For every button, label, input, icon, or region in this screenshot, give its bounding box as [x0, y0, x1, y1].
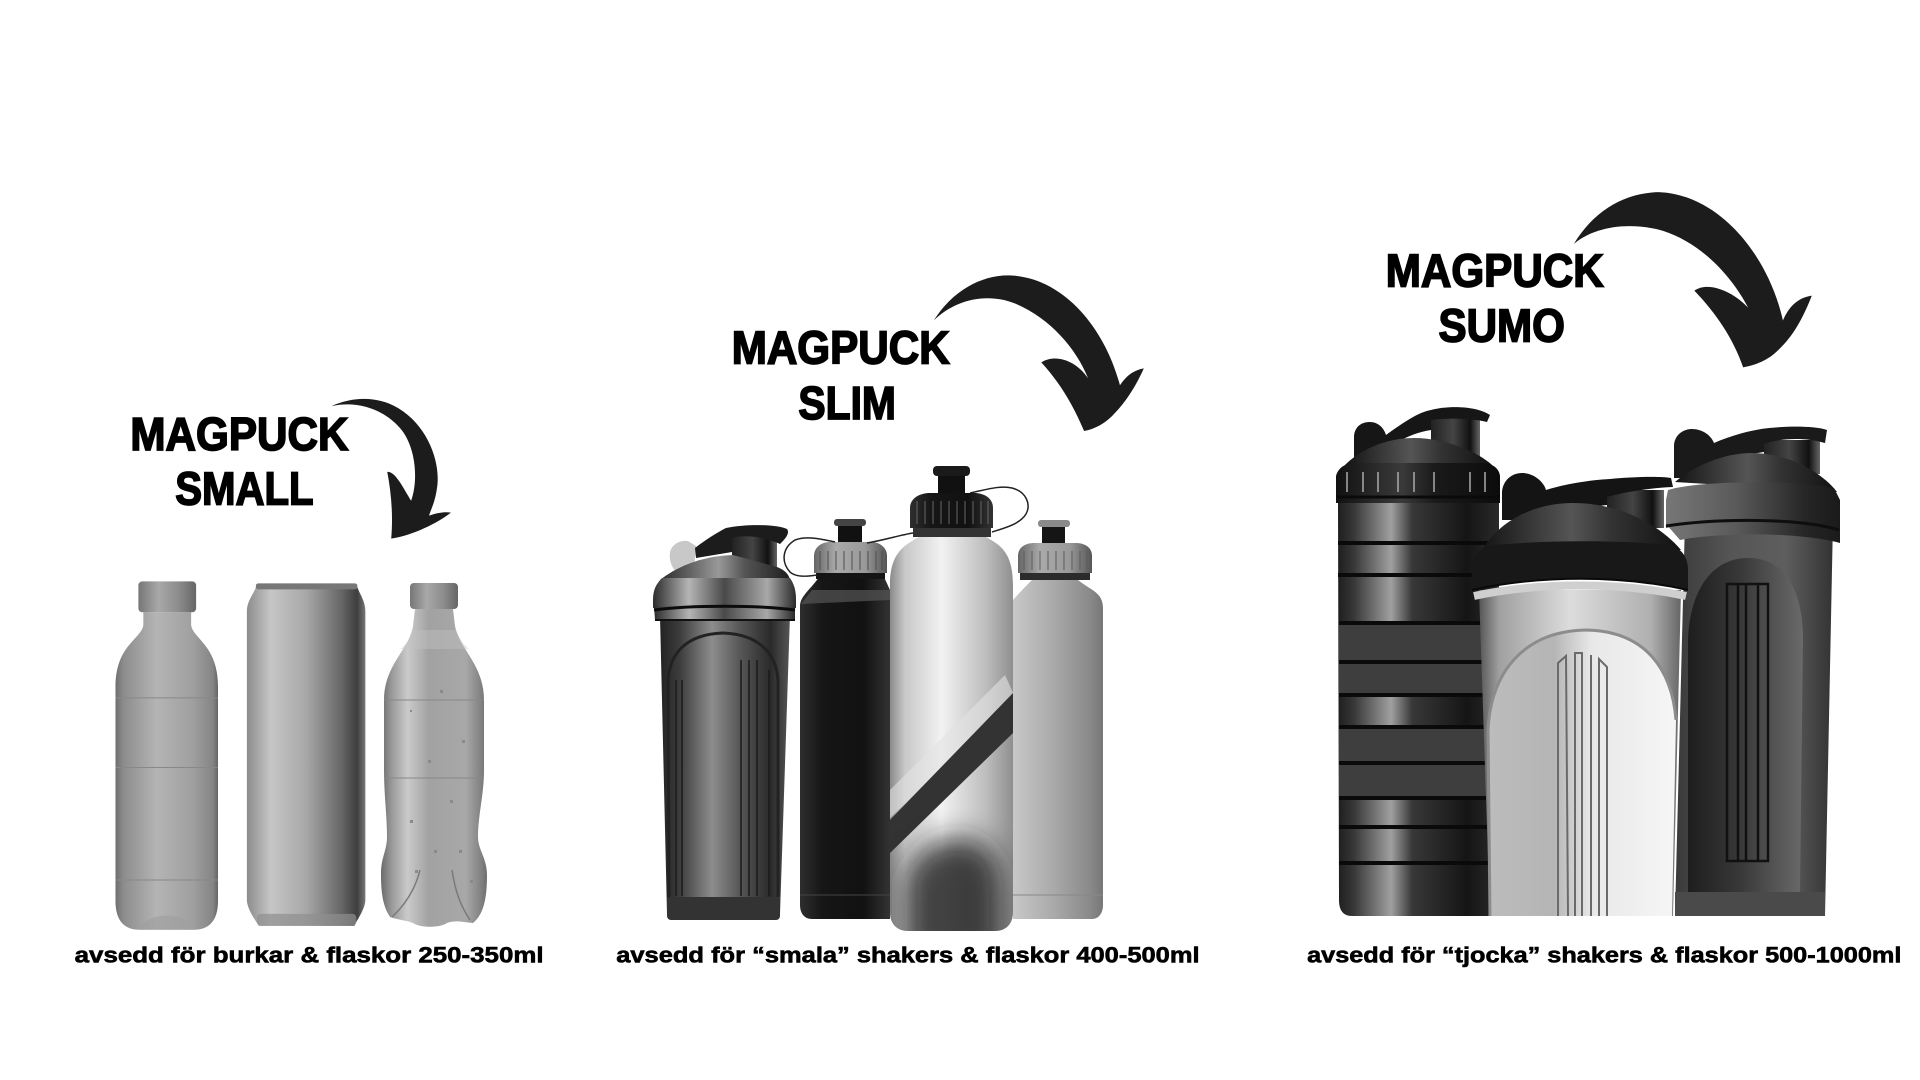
heading: Magpuck Slim: MAGPUCK — [732, 321, 950, 373]
panel: Magpuck Slim — [616, 275, 1200, 968]
heading: Magpuck Slim: SLIM — [798, 377, 896, 429]
caption: small: avsedd för burkar & flaskor 250-350ml — [75, 943, 544, 968]
arrow: small — [332, 399, 451, 539]
heading: Magpuck Sumo: MAGPUCK — [1386, 245, 1604, 297]
icon: shaker, slim — [653, 525, 796, 920]
caption: slim: avsedd för “smala” shakers & flaskor 400-500ml — [616, 943, 1200, 968]
panel: Magpuck Sumo — [1307, 192, 1901, 968]
icon: aluminium can — [247, 583, 365, 926]
icon: strap loop — [784, 487, 1028, 576]
heading: Magpuck Small — [130, 408, 349, 515]
arrow: slim — [934, 275, 1144, 431]
icon: drink bottle, white with stripe — [888, 466, 1014, 960]
icon: contoured bottle — [381, 583, 487, 927]
heading: Magpuck Small: MAGPUCK — [130, 408, 349, 460]
heading: Magpuck Sumo: SUMO — [1438, 299, 1565, 351]
icon: drink bottle, grey right — [1013, 520, 1103, 919]
icon: plastic bottle — [115, 581, 218, 930]
icon: shaker, dark right — [1666, 427, 1840, 916]
icon: shaker, silver centre — [1472, 473, 1688, 916]
icon: drink bottle, black — [800, 519, 890, 919]
heading: Magpuck Sumo — [1386, 245, 1604, 351]
panel: Magpuck Small — [75, 399, 544, 968]
arrow: sumo — [1574, 192, 1812, 367]
heading: Magpuck Slim — [732, 321, 950, 429]
caption: sumo: avsedd för “tjocka” shakers & flaskor 500-1000ml — [1307, 943, 1901, 968]
heading: Magpuck Small: SMALL — [175, 463, 314, 515]
icon: shaker, ribbed tub — [1336, 407, 1500, 916]
